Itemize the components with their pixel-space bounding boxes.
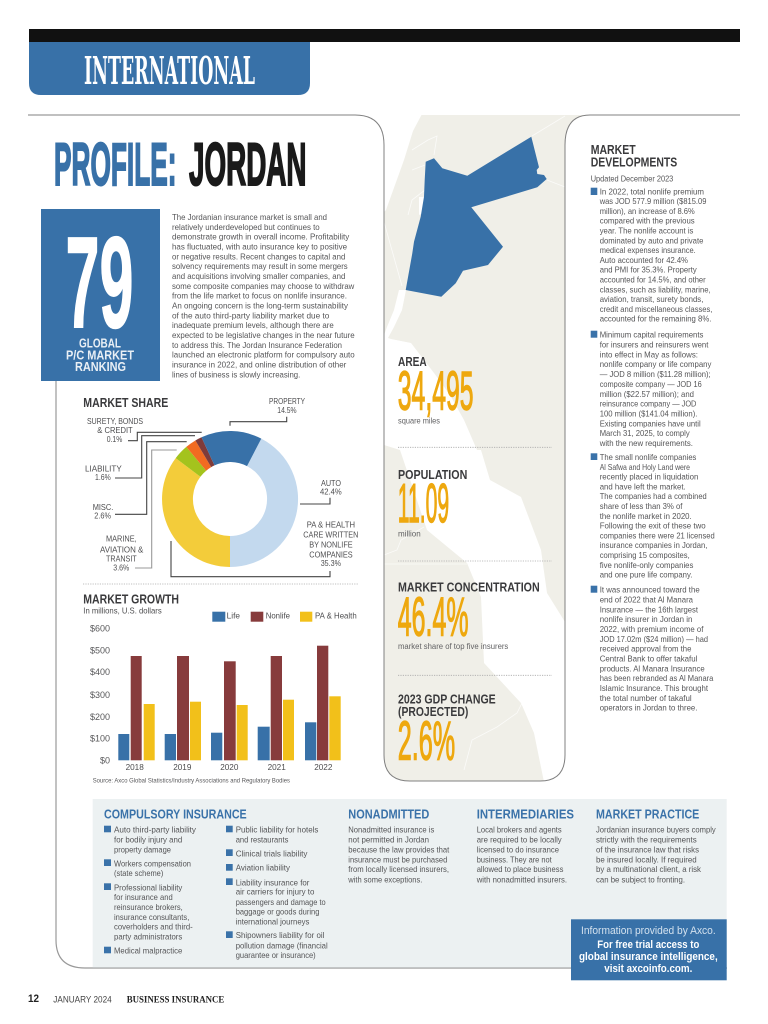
intro text: relatively underdeveloped but continues to xyxy=(172,222,320,232)
development 1 xyxy=(591,186,712,324)
nonlife bars xyxy=(131,646,328,760)
panel outlines xyxy=(28,115,740,968)
intro text xyxy=(172,212,355,379)
development 4: products. Al Manara Insurance xyxy=(600,663,705,673)
development 1: accounted for the remaining 8%. xyxy=(600,314,711,324)
development 1: Auto accounted for 42.4% xyxy=(600,255,688,265)
heading: market developments: DEVELOPMENTS xyxy=(591,156,677,170)
intro text: insurance in 2022, and online distribution of other xyxy=(172,360,346,370)
column: market practice: can be subject to fronting. xyxy=(596,874,685,884)
intro text: lines of business is slowly increasing. xyxy=(172,369,300,379)
column: compulsory insurance: Professional liability xyxy=(114,882,183,892)
column: compulsory insurance: Medical malpractice xyxy=(114,946,182,956)
header bar xyxy=(29,29,740,42)
column: compulsory insurance: (state scheme) xyxy=(114,868,163,878)
title: PROFILE: xyxy=(54,131,176,198)
column: compulsory insurance: international journeys xyxy=(236,917,310,927)
stat: area: AREA xyxy=(398,355,427,369)
ranking box: 79 xyxy=(66,209,134,355)
slice: PA and health xyxy=(162,458,230,567)
footer: BUSINESS INSURANCE xyxy=(127,995,224,1005)
column: compulsory insurance xyxy=(104,807,328,960)
ranking box: GLOBAL xyxy=(79,336,121,350)
development 4: Insurance — the 16th largest xyxy=(600,604,699,614)
donut labels: PA & HEALTH xyxy=(307,521,355,530)
x axis labels: 2019 xyxy=(173,763,192,772)
donut labels: TRANSIT xyxy=(106,555,137,564)
development 4: has been rebranded as Al Manara xyxy=(600,673,714,683)
column: market practice: MARKET PRACTICE xyxy=(596,807,699,821)
development 3: Al Safwa and Holy Land were xyxy=(600,462,690,472)
x axis labels: 2022 xyxy=(314,763,333,772)
stat: market concentration: MARKET CONCENTRATION xyxy=(398,581,540,595)
section tab: international: INTERNATIONAL xyxy=(84,48,255,93)
donut labels: SURETY, BONDS xyxy=(87,417,143,426)
donut chart xyxy=(162,431,298,567)
column: market practice: of the insurance law that risks xyxy=(596,844,700,854)
column: intermediaries: with nonadmitted insurers. xyxy=(476,874,567,884)
column: compulsory insurance: property damage xyxy=(114,844,171,854)
y axis labels: $500 xyxy=(90,645,110,655)
donut labels: AVIATION & xyxy=(100,545,144,554)
stat: area xyxy=(398,355,474,425)
development 2: 100 million ($141.04 million). xyxy=(600,408,697,418)
column: market practice: be insured locally. If required xyxy=(596,854,697,864)
heading: market developments xyxy=(591,143,677,184)
intro text: to address this. The Jordan Insurance Federation xyxy=(172,340,342,350)
development 2: with the new requirements. xyxy=(599,438,693,448)
text: JORDAN xyxy=(189,131,306,198)
ranking box xyxy=(41,209,160,381)
heading: market growth xyxy=(83,592,179,615)
heading: market developments: MARKET xyxy=(591,143,636,157)
y axis labels: $400 xyxy=(90,667,110,677)
x axis labels: 2018 xyxy=(126,763,144,772)
PA and health bars xyxy=(144,696,341,760)
donut labels: PROPERTY xyxy=(269,397,305,406)
chart legend: Life xyxy=(227,611,240,620)
development 4 xyxy=(591,585,714,713)
development 3: The small nonlife companies xyxy=(600,452,697,462)
y axis labels: $100 xyxy=(90,734,110,744)
intro text: launched an electronic platform for compulsory auto xyxy=(172,350,355,360)
development 4: 2022, with premium income of xyxy=(600,624,704,634)
column: compulsory insurance: Aviation liability xyxy=(236,863,291,873)
y axis labels: $300 xyxy=(90,690,110,700)
heading: market growth: MARKET GROWTH xyxy=(83,592,179,606)
column: compulsory insurance: baggage or goods during xyxy=(236,907,320,917)
stat: GDP change xyxy=(398,692,496,772)
column: intermediaries: INTERMEDIARIES xyxy=(477,807,574,821)
donut labels: 1.6% xyxy=(95,473,111,482)
development 1: medical expenses insurance. xyxy=(600,245,696,255)
column: compulsory insurance: insurance consultants, xyxy=(114,912,189,922)
donut labels: COMPANIES xyxy=(309,551,353,560)
column: compulsory insurance: party administrators xyxy=(114,931,183,941)
column: intermediaries: business. They are not xyxy=(477,854,552,864)
column: nonadmitted: with some exceptions. xyxy=(347,874,422,884)
development 1: aviation, transit, surety bonds, xyxy=(600,294,703,304)
column: market practice: Jordanian insurance buyers comply xyxy=(596,824,716,834)
development 4: nonlife insurer in Jordan in xyxy=(600,614,693,624)
donut labels: AUTO xyxy=(321,479,341,488)
development 4: the total number of takaful xyxy=(600,693,692,703)
footer: 12 xyxy=(28,993,39,1005)
stat: population: 11.09 xyxy=(398,472,449,534)
donut labels: MISC. xyxy=(93,503,113,512)
column: nonadmitted: NONADMITTED xyxy=(348,807,429,821)
callout: axco: For free trial access to xyxy=(597,939,700,951)
slice: marine xyxy=(176,447,206,477)
column: nonadmitted: because the law provides that xyxy=(348,844,450,854)
development 3: share of less than 3% of xyxy=(600,501,683,511)
development 2: into effect in May as follows: xyxy=(600,349,698,359)
callout: axco: Information provided by Axco. xyxy=(581,925,716,937)
column: nonadmitted xyxy=(347,807,450,884)
stat: GDP change: 2.6% xyxy=(398,710,455,772)
intro text: of the auto third-party liability market due to xyxy=(172,310,329,320)
development 4: received approval from the xyxy=(600,644,692,654)
stat: GDP change: (PROJECTED) xyxy=(398,705,468,719)
donut labels: 3.6% xyxy=(113,564,129,573)
development 3: insurance companies in Jordan, xyxy=(600,540,707,550)
map: Jordan xyxy=(406,137,547,297)
development 3: comprising 15 composites, xyxy=(600,550,690,560)
y axis labels xyxy=(90,624,110,765)
donut labels: 2.6% xyxy=(94,511,111,520)
development 2: composite company — JOD 16 xyxy=(600,379,702,389)
column: compulsory insurance: air carriers for injury to xyxy=(236,887,315,897)
column: compulsory insurance: and restaurants xyxy=(236,835,289,845)
ranking box: P/C MARKET xyxy=(66,348,134,362)
column: compulsory insurance: Shipowners liability for oil xyxy=(236,930,324,940)
development 3: companies there were 21 licensed xyxy=(600,530,715,540)
column: compulsory insurance: pollution damage (financial xyxy=(236,940,328,950)
y axis labels: $0 xyxy=(100,755,110,765)
column: compulsory insurance: for bodily injury and xyxy=(114,835,182,845)
life bars xyxy=(118,722,316,760)
development 2 xyxy=(591,330,712,448)
column: intermediaries xyxy=(476,807,574,884)
development 1: classes, such as liability, marine, xyxy=(600,284,711,294)
callout: axco xyxy=(571,919,727,980)
column: nonadmitted: not permitted in Jordan xyxy=(348,835,429,845)
callout: axco: global insurance intelligence, xyxy=(579,951,718,963)
intro text: expected to be legislative changes in the near future xyxy=(172,330,355,340)
intro text: has fluctuated, with auto insurance key to positive xyxy=(172,242,347,252)
column: intermediaries: are required to be locally xyxy=(477,835,562,845)
heading: market growth: In millions, U.S. dollars xyxy=(83,606,162,615)
callout: axco: visit axcoinfo.com. xyxy=(604,963,692,975)
stat: market concentration: 46.4% xyxy=(398,586,468,648)
development 1: and PMI for 35.3%. Property xyxy=(600,265,697,275)
slice: property xyxy=(202,431,261,466)
development 4: Central Bank to offer takaful xyxy=(600,654,697,664)
footer: JANUARY 2024 xyxy=(53,994,112,1005)
intro text: An ongoing concern is the long-term sustainability xyxy=(172,300,349,310)
development 3: and have left the market. xyxy=(600,481,686,491)
column: nonadmitted: Nonadmitted insurance is xyxy=(348,824,435,834)
development 2: — JOD 8 million ($11.28 million); xyxy=(600,369,711,379)
development 2: million ($22.57 million); and xyxy=(600,389,694,399)
development 1: was JOD 577.9 million ($815.09 xyxy=(599,196,707,206)
bottom panel xyxy=(93,799,727,968)
column: nonadmitted: from locally licensed insurers, xyxy=(348,864,449,874)
column: compulsory insurance: Auto third-party liability xyxy=(114,824,197,834)
development 2: for insurers and reinsurers went xyxy=(600,340,709,350)
intro text: inadequate premium levels, although there are xyxy=(172,320,334,330)
footer xyxy=(28,993,224,1005)
development 1: accounted for 14.5%, and other xyxy=(600,274,706,284)
development 1: year. The nonlife account is xyxy=(600,226,694,236)
development 3: Following the exit of these two xyxy=(600,521,706,531)
donut labels: BY NONLIFE xyxy=(309,541,353,550)
column: compulsory insurance: guarantee or insurance) xyxy=(236,950,316,960)
development 3: and one pure life company. xyxy=(600,570,692,580)
development 3: The companies had a combined xyxy=(600,491,707,501)
chart legend: Nonlife xyxy=(266,611,290,620)
y axis labels: $600 xyxy=(90,624,110,634)
development 4: It was announced toward the xyxy=(600,585,700,595)
column: compulsory insurance: Workers compensation xyxy=(114,859,191,869)
stat: GDP change: 2023 GDP CHANGE xyxy=(398,692,496,706)
stat: population: POPULATION xyxy=(398,468,467,482)
column: intermediaries: Local brokers and agents xyxy=(477,824,562,834)
intro text: The Jordanian insurance market is small and xyxy=(172,212,327,222)
column: compulsory insurance: Clinical trials liability xyxy=(236,848,308,858)
development 1: In 2022, total nonlife premium xyxy=(600,186,704,196)
intro text: solvency requirements may result in some mergers xyxy=(172,261,348,271)
column: market practice: by a multinational client, a risk xyxy=(596,864,702,874)
column: intermediaries: licensed to do insurance xyxy=(477,844,559,854)
donut labels: 0.1% xyxy=(107,435,122,444)
development 2: March 31, 2025, to comply xyxy=(600,428,690,438)
development 1: dominated by auto and private xyxy=(600,235,704,245)
section tab: international xyxy=(29,42,310,95)
donut labels: LIABILITY xyxy=(85,465,122,474)
heading: market developments: Updated December 2023 xyxy=(591,174,673,184)
donut labels xyxy=(85,397,358,573)
column: compulsory insurance: Public liability for hotels xyxy=(236,824,319,834)
intro text: some composite companies may choose to withdraw xyxy=(172,281,355,291)
column: compulsory insurance: COMPULSORY INSURANCE xyxy=(104,807,247,821)
development 4: Islamic Insurance. This brought xyxy=(600,683,709,693)
stat: population: million xyxy=(398,530,421,539)
source note: Source: Axco Global Statistics/Industry Associations and Regulatory Bodies xyxy=(93,777,291,784)
development 1: compared with the previous xyxy=(600,216,695,226)
slice: misc xyxy=(186,440,211,471)
column: compulsory insurance: passengers and damage to xyxy=(236,897,326,907)
donut labels: 35.3% xyxy=(321,559,341,568)
chart legend xyxy=(212,611,357,622)
development 3: recently placed in liquidation xyxy=(600,472,699,482)
column: nonadmitted: insurance must be purchased xyxy=(348,854,447,864)
map background xyxy=(384,114,590,782)
slice: liability xyxy=(195,437,214,467)
donut labels: 42.4% xyxy=(320,487,342,496)
intro text: or negative results. Recent changes to capital and xyxy=(172,251,345,261)
development 2: Existing companies have until xyxy=(600,418,701,428)
donut labels: MARINE, xyxy=(106,535,137,544)
slice: auto xyxy=(230,439,298,567)
development 1: credit and miscellaneous classes, xyxy=(600,304,712,314)
stat: area: square miles xyxy=(398,416,440,425)
development 3: five nonlife-only companies xyxy=(600,560,694,570)
development 4: JOD 17.02m ($24 million) — had xyxy=(600,634,708,644)
column: market practice: strictly with the requirements xyxy=(596,835,697,845)
development 2: nonlife company or life company xyxy=(600,359,712,369)
intro text: from the life market to focus on nonlife insurance. xyxy=(172,291,347,301)
column: compulsory insurance: for insurance and xyxy=(114,892,173,902)
donut labels: & CREDIT xyxy=(97,426,133,435)
intro text: demonstrate growth in overall income. Profitability xyxy=(172,232,350,242)
stat: market concentration: market share of top five insurers xyxy=(398,642,508,651)
x axis labels xyxy=(126,763,333,772)
x axis labels: 2020 xyxy=(220,763,239,772)
development 3 xyxy=(591,452,715,580)
column: compulsory insurance: coverholders and third- xyxy=(114,922,193,932)
ranking box: RANKING xyxy=(75,360,126,374)
y axis labels: $200 xyxy=(90,712,110,722)
bar chart: market growth xyxy=(90,624,341,772)
column: compulsory insurance: Liability insurance for xyxy=(236,877,309,887)
column: intermediaries: allowed to place business xyxy=(477,864,564,874)
development 2: reinsurance company — JOD xyxy=(600,399,696,409)
chart legend: PA & Health xyxy=(315,611,357,620)
x axis labels: 2021 xyxy=(268,763,286,772)
development 3: the nonlife market in 2020. xyxy=(600,511,692,521)
text: 34,495 xyxy=(398,360,474,422)
donut labels: 14.5% xyxy=(277,406,297,415)
leader lines xyxy=(115,417,330,577)
development 2: Minimum capital requirements xyxy=(600,330,704,340)
development 4: end of 2022 that Al Manara xyxy=(600,594,693,604)
stat: population xyxy=(398,468,467,539)
column: compulsory insurance: reinsurance brokers, xyxy=(114,902,183,912)
development 4: operators in Jordan to three. xyxy=(600,703,697,713)
development 1: million), an increase of 8.6% xyxy=(600,206,695,216)
heading: market share: MARKET SHARE xyxy=(83,396,168,410)
intro text: and acquisitions involving smaller companies, and xyxy=(172,271,345,281)
donut labels: CARE WRITTEN xyxy=(303,531,358,540)
column: market practice xyxy=(596,807,716,884)
